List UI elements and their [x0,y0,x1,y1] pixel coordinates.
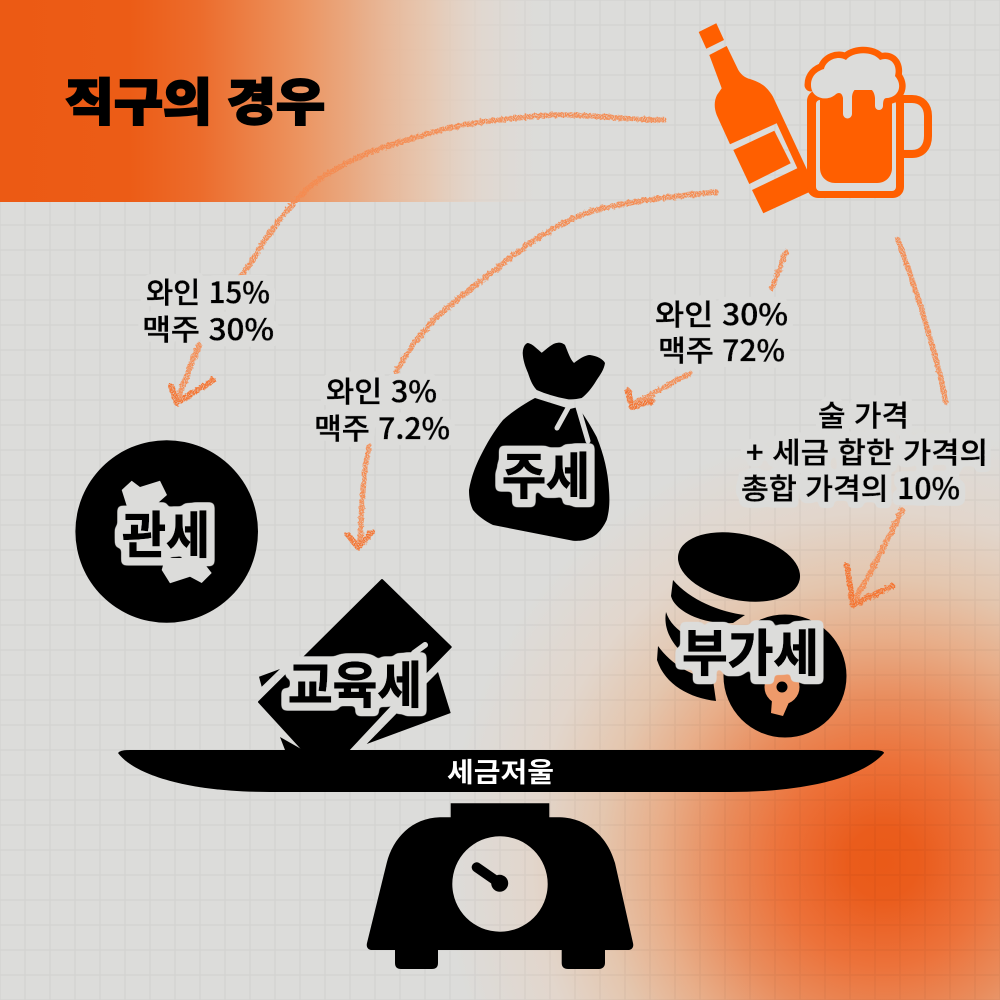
label: customs duty rates: 맥주 30% [142,307,274,349]
label: education tax rates [314,369,450,448]
label: value added tax rate: 총합 가격의 10% [741,466,960,508]
icon: scale pan [118,750,884,792]
icon: customs duty coin [75,440,258,623]
badge: value added tax: 부가세 [682,614,819,686]
title: 직구의 경우 [65,63,325,135]
icon: wine bottle [699,23,810,213]
icon: money bag [469,343,609,541]
label: value added tax rate [741,393,988,508]
label: liquor tax rates [655,292,788,370]
badge: education tax: 교육세 [288,646,422,718]
arrow: to education tax [348,192,716,547]
arrow: to value added tax [847,240,946,605]
label: liquor tax rates: 맥주 72% [658,328,785,370]
icon: beer mug [807,53,928,198]
arrow: to customs duty [171,115,664,403]
label: customs duty rates [142,270,274,349]
badge: liquor tax: 주세 [502,437,590,509]
icon: tickets [259,580,451,752]
arrow: to liquor tax [628,252,786,407]
label: value added tax rate: 술 가격 [818,393,909,435]
title banner [0,0,560,202]
badge: customs duty: 관세 [122,496,210,568]
icon: scale body [367,803,633,969]
icon: coin stack [657,522,846,738]
label: education tax rates: 맥주 7.2% [314,406,450,448]
label: education tax rates: 와인 3% [326,369,437,411]
scale label: 세금저울 [447,751,554,790]
label: customs duty rates: 와인 15% [146,270,270,312]
label: value added tax rate: + 세금 합한 가격의 [746,430,988,472]
label: liquor tax rates: 와인 30% [655,292,788,334]
